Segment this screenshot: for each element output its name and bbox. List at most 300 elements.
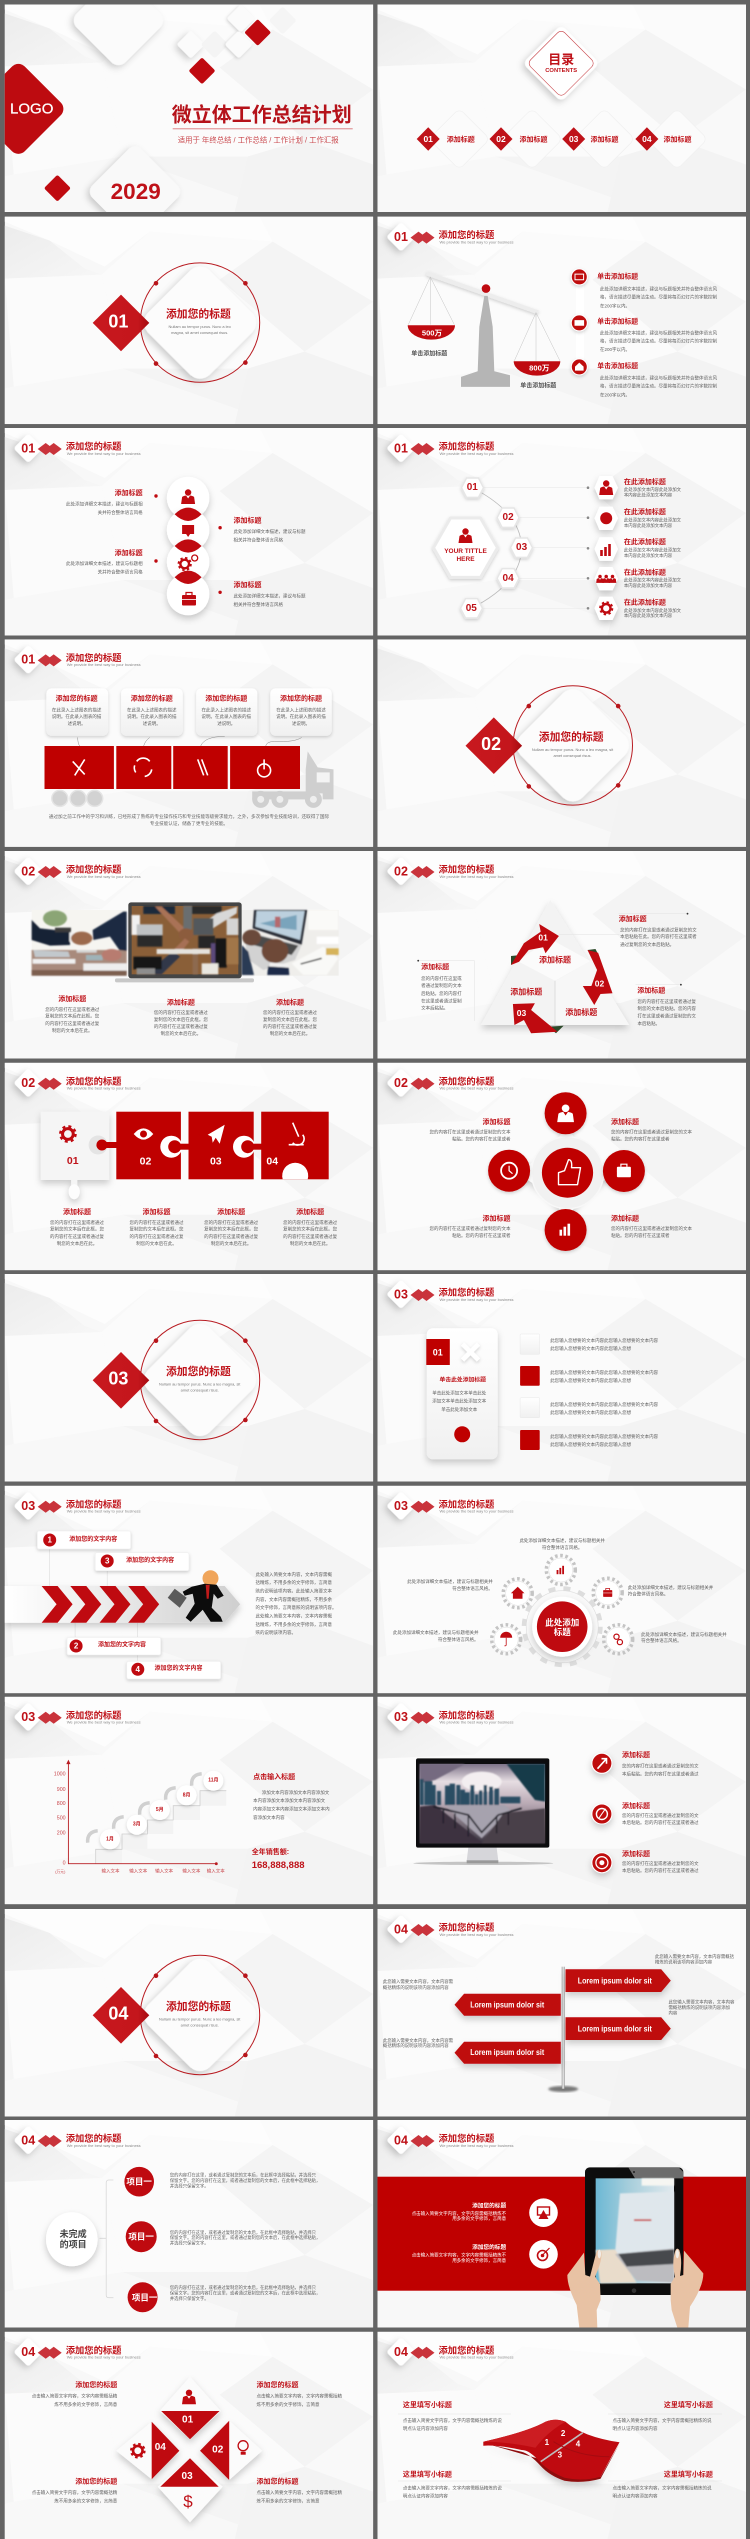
section caption: amet consequat risus.	[181, 2022, 219, 2028]
column 1: 制您的文本后在此。	[57, 1240, 97, 1247]
text block right top: 通过复制您的文本后粘贴。	[620, 941, 674, 948]
right text blocks: 本内容此处添加文本内容	[624, 552, 673, 559]
header: 添加您的标题	[438, 441, 495, 452]
header: 03	[21, 1499, 35, 1513]
list row 3	[520, 1398, 659, 1418]
note left bottom: 概括精炼的说明该项内容添加内容	[383, 2042, 449, 2049]
section caption: Nullam au tempor purus. Nunc a leo	[169, 324, 231, 329]
hands	[567, 2249, 703, 2328]
column 4	[283, 1207, 338, 1247]
card 2: 添加您的标题	[131, 694, 173, 703]
panel: slide 15 chevrons	[5, 1486, 373, 1693]
note middle right: 此您输入需要文本内容，文本内容	[668, 1998, 735, 2006]
year badge	[85, 146, 180, 212]
small white diamonds	[174, 6, 254, 62]
puzzle numbers: 03	[210, 1156, 222, 1168]
arrow 02: 02	[595, 978, 604, 988]
feature text 1: 您的内容打在这里或者通过复制您的文	[622, 1762, 699, 1769]
note left top: 概括精炼的说明该项内容添加内容	[383, 1984, 449, 1991]
header: We provide the best way to your business	[440, 451, 513, 456]
card 2: 在此录入上述图表的描述	[127, 707, 177, 714]
item 1: 此处添加详细文本描述，建议与标题相关并符合整体语言风	[600, 286, 717, 293]
note top-left: 这里填写小标题	[403, 2400, 452, 2409]
band text 2	[412, 2243, 507, 2264]
red diamonds	[44, 19, 271, 202]
white circle icon 2	[529, 2240, 558, 2269]
main circle: 未完成	[60, 2228, 87, 2239]
text column 3: 您的内容打在这里或者通过	[263, 1009, 317, 1016]
photo: typing on laptop	[242, 910, 339, 976]
panel: slide 10 triangle	[378, 851, 746, 1058]
laptop with teamwork photo	[115, 902, 254, 982]
list row 1: 此您输入您想要的文本内容此您输入您想要的文本内容	[550, 1337, 659, 1344]
tablet	[585, 2167, 683, 2295]
note top right: 此您输入需要文本内容，文本内容需概括	[655, 1953, 735, 1960]
note top-left: 点击输入简要文字内容，文字内容需概括精炼的说	[403, 2417, 502, 2424]
header	[386, 434, 513, 463]
text bottom-right: 您的内容打在这里或者通过复制您的文本	[611, 1225, 692, 1232]
caption: 通过加之前工作中的学习和训练，已经形成了熟练的专业操作技巧和专业技能等级要求能力。之外，多次参加专业技能培训，还取得了国际	[49, 813, 330, 820]
column 2: 您的内容打在这里或者通过	[130, 1219, 184, 1226]
project 2: 您的内容打在这里，或者通过复制您的文本后，在此框中选择粘贴，并选择只	[170, 2229, 317, 2236]
satellite gear upper left	[503, 1579, 532, 1608]
column 4: 添加标题	[296, 1207, 324, 1216]
trailer wheels	[52, 790, 103, 806]
header: 添加您的标题	[438, 2133, 495, 2144]
bottom diamond: $	[183, 2492, 193, 2511]
column 2: 复制您的文本后在此框。您	[130, 1225, 184, 1232]
text bottom-left: 点击输入简要文字内容，文字内容需概括精	[32, 2489, 118, 2496]
feature icon 3	[592, 1853, 612, 1873]
right text blocks: 在此添加标题	[624, 598, 666, 606]
left text 2	[66, 548, 158, 576]
item 2: 在200字以内。	[600, 346, 630, 353]
list row 4: 此您输入您想要的文本内容此您输入您想要的文本内容	[550, 1433, 659, 1440]
text column 2: 添加标题	[167, 998, 195, 1006]
axes	[67, 1761, 217, 1865]
callout 2: 2	[74, 1641, 79, 1650]
text top: 符合整体语言风格。	[542, 1544, 582, 1551]
right text 2: 添加标题	[234, 580, 261, 589]
header: 04	[394, 2133, 408, 2147]
note top-right	[608, 2400, 722, 2432]
node icons	[574, 274, 584, 371]
side paragraph: 此处输入简要文本内容，文本内容需概	[256, 1571, 332, 1578]
column 2: 的内容打在这里或者通过复	[130, 1233, 184, 1240]
contents item 3	[562, 110, 632, 156]
left text 1: 关并符合整体语言风格	[98, 509, 143, 516]
header: 03	[394, 1710, 408, 1724]
text bottom-right: 添加您的标题	[257, 2476, 298, 2485]
text top-left	[430, 1117, 511, 1142]
large white diamond	[70, 0, 167, 69]
project 3: 并选择只保留文字。	[170, 2295, 209, 2302]
section number diamond: 03	[108, 1369, 128, 1389]
y axis labels: 900	[57, 1787, 66, 1793]
text column 1: 复制您的文本后在此框。您	[45, 1012, 100, 1020]
header: We provide the best way to your business	[440, 1085, 513, 1090]
hexagon numbers	[466, 482, 528, 614]
panel: slide 18 monitor	[378, 1697, 746, 1904]
arrow 03: 03	[517, 1008, 526, 1018]
text bottom-left: 粘贴。您的内容打在这里或者	[452, 1232, 511, 1239]
text bottom-right	[611, 1214, 692, 1239]
card 1: 在此录入上述图表的描述	[52, 707, 102, 714]
sign 4	[454, 2042, 561, 2064]
note top-left	[398, 2400, 511, 2432]
note top right: 精炼的说明该项内容添加内容	[655, 1958, 713, 1966]
right icons	[596, 480, 616, 614]
pole	[562, 1967, 565, 2089]
header: 03	[21, 1710, 35, 1724]
text block right top: 添加标题	[619, 914, 647, 923]
section caption: amet consequat risus.	[181, 1388, 219, 1392]
text bottom-left: 添加您的标题	[75, 2476, 117, 2485]
project 3: 项目一	[132, 2292, 158, 2302]
header	[386, 1068, 513, 1098]
column 3: 的内容打在这里或者通过复	[204, 1233, 259, 1240]
note left top	[383, 1978, 454, 1991]
center ring	[532, 1137, 604, 1209]
note left bottom	[383, 2037, 454, 2049]
triangle labels: 添加标题	[565, 1007, 597, 1017]
text top-left: 粘贴。您的内容打在这里或者	[452, 1135, 511, 1142]
header: 01	[21, 441, 35, 455]
callout 1: 添加您的文字内容	[69, 1535, 117, 1543]
y axis labels: 1000	[54, 1772, 66, 1778]
main circle	[46, 2212, 98, 2266]
feature card: 单击此处添加标题	[440, 1375, 486, 1383]
text block right bottom: 打在这里或者通过复制您的文	[638, 1012, 696, 1020]
section caption: Nullam au tempor purus. Nunc a leo magna, sit	[159, 2016, 241, 2022]
scale pillar	[461, 296, 510, 387]
text upper right: 此处添加详细文本描述，建议与标题相关并	[628, 1584, 714, 1591]
right pan	[514, 313, 560, 376]
right text 1	[218, 516, 306, 544]
month markers: 8月	[183, 1792, 190, 1798]
card 2	[121, 688, 183, 736]
panel: slide 5 circles	[5, 428, 373, 636]
text block left: 您的内容打在这里或	[421, 975, 462, 982]
callout 1: 1	[47, 1535, 52, 1544]
right text 2: 此处添加详细文本描述，建议与标题	[234, 592, 306, 600]
header	[13, 857, 141, 886]
project 2: 并选择只保留文字。	[170, 2240, 209, 2246]
feature text 2: 添加标题	[622, 1801, 650, 1810]
leader lines	[418, 914, 688, 1021]
text column 3: 的内容打在这里或者通过复	[263, 1023, 317, 1030]
feature card: 单击此处添加文本	[441, 1406, 478, 1413]
feature text 2	[622, 1801, 699, 1826]
card 4: 在此录入上述图表的描述	[276, 707, 326, 714]
header: 04	[394, 1922, 408, 1936]
text bottom-left	[32, 2476, 118, 2504]
left diamond: 04	[155, 2442, 166, 2453]
note top right	[655, 1953, 735, 1966]
puzzle numbers: 02	[140, 1156, 151, 1168]
right text blocks: 此处添加文本内容此处添加文	[624, 607, 682, 614]
contents item 2: 添加标题	[520, 134, 548, 144]
arrow 01	[511, 924, 559, 965]
band text 2: 点击输入简要文字内容，文字内容需概括精炼不	[412, 2252, 507, 2258]
satellite gear lower right	[604, 1625, 633, 1654]
feature text 1	[622, 1750, 699, 1778]
end dots	[587, 486, 589, 610]
y axis labels: 500	[57, 1815, 66, 1821]
section number diamond: 01	[108, 311, 128, 331]
column 1: 复制您的文本后在此框。您	[50, 1225, 104, 1232]
puzzle piece 3	[160, 1112, 254, 1179]
header: 添加您的标题	[438, 2344, 495, 2355]
month markers: 1月	[106, 1836, 114, 1842]
panel: slide 12 radial	[378, 1063, 746, 1270]
text top-left: 您的内容打在这里或者通过复制您的文本	[430, 1128, 511, 1135]
side paragraph: 此处输入简要文本内容，文本内容需概	[256, 1612, 332, 1619]
total sales	[252, 1847, 305, 1871]
stacked circles	[167, 477, 209, 615]
header: 添加您的标题	[438, 1709, 495, 1720]
project 1: 并选择只保留文字。	[170, 2182, 209, 2190]
center thumbs-up	[542, 1148, 593, 1198]
text upper left: 此处添加详细文本描述，建议与标题相关并	[407, 1578, 493, 1585]
timeline stem	[576, 277, 584, 367]
text column 1	[45, 994, 100, 1034]
list row 1: 此您输入您想要的文本内容此您输入您想	[550, 1345, 632, 1352]
scale labels	[411, 350, 556, 390]
contents item 4: 添加标题	[664, 134, 692, 144]
header	[386, 2126, 513, 2155]
text top-left: 点击输入简要文字内容，文字内容需概括精	[32, 2392, 118, 2399]
right hexagons	[594, 476, 618, 620]
text bottom-left	[430, 1214, 511, 1239]
hexagon numbers: 05	[466, 603, 477, 614]
project 3: 保留文字。您的内容打在这里，或者通过复制您的文本后，在此框中选择粘贴，	[170, 2290, 320, 2296]
chevrons	[42, 1586, 159, 1623]
text block left: 添加标题	[421, 962, 449, 971]
arrow 01: 01	[538, 933, 548, 943]
header: We provide the best way to your business	[67, 451, 141, 456]
year badge: 2029	[111, 179, 161, 204]
y axis labels	[54, 1772, 66, 1874]
text top-right: 添加您的标题	[257, 2380, 298, 2389]
title: 微立体工作总结计划	[172, 102, 352, 126]
text block left: 文本后粘贴。	[421, 1004, 448, 1012]
header: 添加您的标题	[66, 1498, 122, 1509]
contents badge: CONTENTS	[545, 68, 577, 74]
text column 2: 的内容打在这里或者通过复	[154, 1023, 208, 1030]
y axis labels: 200	[57, 1831, 66, 1837]
chart note: 内容添加文本内容添加文本添加文本内	[253, 1805, 330, 1812]
header	[386, 222, 513, 252]
feature text 2: 本后粘贴。您的内容打在这里或者通过	[622, 1819, 699, 1826]
header: 添加您的标题	[438, 229, 495, 240]
panel: slide 20 signpost	[378, 1909, 746, 2116]
text top-right: 添加标题	[611, 1117, 639, 1126]
header: 03	[394, 1499, 408, 1513]
panel: slide 19 section 04	[5, 1909, 373, 2116]
card 1: 添加您的标题	[56, 694, 98, 703]
item 1: 在200字以内。	[600, 303, 630, 310]
contents item 1: 01	[423, 134, 433, 144]
text block left	[421, 962, 462, 1012]
triangle labels	[510, 954, 597, 1017]
puzzle numbers: 04	[266, 1156, 278, 1168]
note top-right: 点击输入简要文字内容，文字内容需概括精炼的说	[612, 2417, 712, 2424]
project 1: 您的内容打在这里，或者通过复制您的文本后，在此框中选择粘贴，并选择只	[170, 2172, 317, 2178]
item 3: 格，语言描述尽量简洁生动。尽量将每页幻灯片的字数控制	[600, 383, 717, 390]
arrow band	[5, 1586, 240, 1623]
list row 4	[520, 1430, 659, 1450]
right text blocks: 本内容此处添加文本内容	[624, 492, 673, 498]
card 2: 述说明。	[143, 720, 161, 727]
numbered hexagons	[460, 478, 532, 618]
red cargo boxes	[44, 746, 300, 789]
section number diamond	[93, 1352, 149, 1409]
3d triangle	[481, 900, 629, 1025]
section title: 添加您的标题	[166, 1999, 231, 2013]
header: We provide the best way to your business	[440, 1719, 513, 1724]
header: 添加您的标题	[66, 1709, 122, 1720]
chart note: 本内容添加文本添加文本内容添加文	[253, 1797, 326, 1804]
column 2	[130, 1207, 184, 1247]
item 1	[597, 271, 717, 310]
list row 2: 此您输入您想要的文本内容此您输入您想	[550, 1377, 632, 1384]
text column 1: 您的内容打在这里或者通过	[45, 1006, 100, 1013]
right text blocks: 此处添加文本内容此处添加文	[624, 546, 682, 554]
header: 添加您的标题	[66, 652, 122, 663]
section ring	[138, 1318, 262, 1442]
project 2: 项目一	[128, 2232, 154, 2242]
column 1: 添加标题	[63, 1207, 91, 1216]
note bottom-left: 点击输入简要文字内容，文字内容需概括精炼的说	[403, 2484, 502, 2491]
text bottom-right: 添加标题	[611, 1213, 639, 1222]
sign 4: Lorem ipsum dolor sit	[470, 2048, 544, 2057]
text column 3: 制您的文本后在此。	[270, 1030, 310, 1037]
header: 添加您的标题	[66, 864, 122, 875]
hexagon numbers: 04	[503, 573, 514, 584]
text top-left: 炼不用多余的文字修饰，言简意	[54, 2401, 118, 2408]
header	[386, 1915, 513, 1944]
text bottom-right: 点击输入简要文字内容，文字内容需概括精	[257, 2489, 342, 2496]
note bottom-left: 明点认证内容添加内容	[403, 2492, 448, 2499]
section title: 添加您的标题	[539, 729, 604, 743]
list row 3: 此您输入您想要的文本内容此您输入您想	[550, 1409, 632, 1416]
satellite gear lower left	[492, 1625, 521, 1654]
text block right bottom: 您的内容打在这里或者通过复	[638, 998, 696, 1005]
connector arc	[471, 488, 522, 608]
callout 4: 添加您的文字内容	[154, 1664, 203, 1672]
panel: slide 24 ribbon	[378, 2332, 746, 2539]
curled arrows	[88, 1774, 202, 1843]
side paragraph	[256, 1571, 336, 1636]
panel: slide 23 four triangles	[5, 2332, 373, 2539]
node bottom	[545, 1209, 587, 1251]
contents badge: 目录	[548, 52, 574, 67]
arrow 03	[513, 1003, 564, 1033]
right text blocks: 此处添加文本内容此处添加文	[624, 516, 682, 524]
note middle right: 需概括精炼的说明该项内容添加	[668, 2004, 730, 2011]
feature card: 添加文本单击此处添加文本	[432, 1398, 487, 1404]
chart note: 点击输入标题	[253, 1772, 295, 1781]
section number diamond	[93, 295, 149, 351]
text bottom-left: 炼不用多余的文字修饰，言简意	[54, 2497, 118, 2504]
text upper right	[628, 1584, 714, 1598]
right text blocks: 此处添加文本内容此处添加文	[624, 576, 682, 584]
text top-right: 炼不用多余的文字修饰，言简意	[257, 2401, 320, 2408]
text lower left: 此处添加详细文本描述，建议与标题相关并	[393, 1629, 479, 1636]
month markers: 3月	[133, 1822, 141, 1828]
item 2	[597, 316, 717, 353]
panel: slide 4 scale	[378, 217, 746, 424]
text block right top	[619, 914, 697, 948]
feature icon 2	[592, 1804, 612, 1824]
card 4: 说明。在此录入图表的描	[276, 713, 326, 720]
x axis labels: 输入文本	[102, 1867, 120, 1874]
panel: slide 14 list card	[378, 1274, 746, 1482]
ribbon: 2	[561, 2429, 566, 2438]
card 3	[196, 688, 257, 736]
header: We provide the best way to your business	[67, 662, 141, 667]
side paragraph: 括精炼，不用多余的文字修饰，言简意	[256, 1579, 332, 1586]
list row 2: 此您输入您想要的文本内容此您输入您想要的文本内容	[550, 1369, 659, 1376]
header: 03	[394, 1287, 408, 1301]
text bottom-right: 炼不用多余的文字修饰，言简意	[257, 2497, 320, 2504]
callout 1	[37, 1531, 131, 1549]
text top-left: 添加标题	[482, 1117, 510, 1126]
column 3: 您的内容打在这里或者通过	[204, 1219, 259, 1226]
section ring	[138, 1953, 262, 2077]
text column 3: 复制您的文本后在此框。您	[263, 1016, 317, 1023]
right text blocks	[624, 477, 682, 619]
header	[386, 2337, 513, 2367]
puzzle piece 4	[233, 1112, 329, 1179]
header: We provide the best way to your business	[440, 1297, 513, 1302]
caption: 专业技能认证，储备了更专业的技能。	[150, 820, 228, 827]
section caption	[159, 2016, 241, 2028]
header: We provide the best way to your business	[67, 2354, 141, 2359]
header: 04	[21, 2133, 35, 2147]
puzzle piece 1	[41, 1112, 109, 1199]
header: 添加您的标题	[438, 1922, 495, 1933]
section caption: amet consequat risus.	[553, 753, 592, 758]
text block left: 在这里或者通过复制	[421, 998, 462, 1004]
text lower right: 此处添加详细文本描述，建议与标题相关并	[641, 1631, 727, 1638]
text upper left	[407, 1578, 493, 1592]
text block left: 后粘贴。您的内容打	[421, 990, 462, 997]
white circle icon 1	[529, 2198, 558, 2227]
y axis labels: (万元)	[55, 1870, 66, 1874]
text top: 此处添加详细文本描述，建议与标题相关并	[519, 1537, 605, 1544]
right diamond	[200, 2421, 262, 2480]
scale beam	[426, 271, 539, 314]
x axis labels: 输入文本	[155, 1867, 174, 1874]
text bottom-right	[256, 2476, 342, 2504]
header: We provide the best way to your business	[440, 2143, 513, 2148]
scale labels: 单击添加标题	[520, 382, 556, 390]
section caption: Nullam au tempor purus. Nunc a leo magna, sit	[159, 1382, 241, 1386]
right text 1: 此处添加详细文本描述，建议与标题	[234, 528, 306, 535]
left text 1: 此处添加详细文本描述，建议与标题相	[66, 500, 143, 508]
main hexagon: HERE	[456, 556, 475, 563]
panel: slide 2 contents	[378, 4, 746, 212]
section caption	[168, 326, 231, 335]
band text 1: 添加您的标题	[472, 2202, 507, 2210]
card 2: 说明。在此录入图表的描	[127, 713, 177, 720]
header	[13, 2126, 141, 2155]
leader dots	[417, 913, 688, 986]
item 2: 格，语言描述尽量简洁生动。尽量将每页幻灯片的字数控制	[600, 338, 717, 345]
satellite gear upper right	[593, 1578, 622, 1607]
